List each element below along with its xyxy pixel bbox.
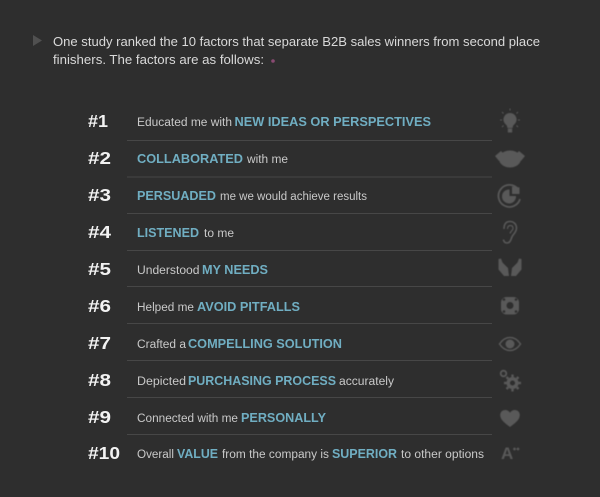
row 5: #5 bbox=[88, 259, 111, 279]
icon: gears bbox=[501, 371, 521, 392]
row 10: #10 bbox=[88, 443, 120, 463]
row 8: #8 bbox=[88, 370, 111, 390]
row 2: #2 bbox=[88, 148, 111, 168]
row 8: Depicted bbox=[137, 376, 186, 388]
row 9 bbox=[88, 407, 520, 427]
icon: heart bbox=[500, 410, 520, 427]
row 2: COLLABORATED bbox=[137, 152, 243, 166]
row 10: SUPERIOR bbox=[332, 447, 397, 461]
icon: play bullet bbox=[33, 35, 42, 46]
row 7: COMPELLING SOLUTION bbox=[188, 337, 342, 351]
row 9: #9 bbox=[88, 407, 111, 427]
row 5: MY NEEDS bbox=[202, 263, 268, 277]
row 8: accurately bbox=[339, 376, 394, 388]
row 8: PURCHASING PROCESS bbox=[188, 374, 336, 388]
row 1: #1 bbox=[88, 111, 108, 131]
row 7 bbox=[88, 333, 520, 353]
row 8 bbox=[88, 370, 521, 392]
row 10: Overall bbox=[137, 449, 174, 461]
icon: lifebuoy bbox=[501, 297, 519, 314]
row 5: Understood bbox=[137, 265, 200, 277]
icon: handshake bbox=[495, 150, 525, 168]
row 1 bbox=[88, 108, 520, 132]
row 10: VALUE bbox=[177, 447, 218, 461]
icon: pie chart in ring bbox=[498, 185, 520, 207]
intro line two: finishers. The factors are as follows: bbox=[53, 52, 264, 67]
row 4 bbox=[88, 222, 516, 243]
row 10: from the company is bbox=[222, 449, 329, 461]
row 7: Crafted a bbox=[137, 339, 187, 351]
row 10 bbox=[88, 443, 520, 463]
row 4: #4 bbox=[88, 222, 111, 242]
row 6: #6 bbox=[88, 296, 111, 316]
icon: light bulb bbox=[500, 108, 520, 132]
row 3: PERSUADED bbox=[137, 189, 216, 203]
row 6 bbox=[88, 296, 519, 316]
icon: A plus plus grade bbox=[501, 444, 520, 463]
row 7: #7 bbox=[88, 333, 111, 353]
row 6: AVOID PITFALLS bbox=[197, 300, 300, 314]
row 3: me we would achieve results bbox=[220, 191, 367, 203]
row 3: #3 bbox=[88, 185, 111, 205]
intro line one: One study ranked the 10 factors that separate B2B sales winners from second place bbox=[53, 34, 540, 49]
icon: A plus plus grade: A bbox=[501, 444, 513, 463]
row 6: Helped me bbox=[137, 302, 194, 314]
row 1: NEW IDEAS OR PERSPECTIVES bbox=[234, 115, 431, 129]
row 9: PERSONALLY bbox=[241, 411, 327, 425]
row 4: LISTENED bbox=[137, 226, 199, 240]
row 4: to me bbox=[204, 228, 234, 240]
intro text block bbox=[33, 34, 540, 67]
row 10: to other options bbox=[401, 449, 484, 461]
row 2: with me bbox=[246, 154, 288, 166]
row 2 bbox=[88, 148, 525, 168]
row 5 bbox=[88, 258, 522, 279]
icon: ear bbox=[504, 222, 516, 243]
icon: open hands bbox=[498, 258, 522, 276]
icon: eye bbox=[500, 338, 520, 350]
row 3 bbox=[88, 185, 520, 207]
row 9: Connected with me bbox=[137, 413, 238, 425]
row 1: Educated me with bbox=[137, 117, 232, 129]
pink marker bbox=[271, 59, 275, 63]
